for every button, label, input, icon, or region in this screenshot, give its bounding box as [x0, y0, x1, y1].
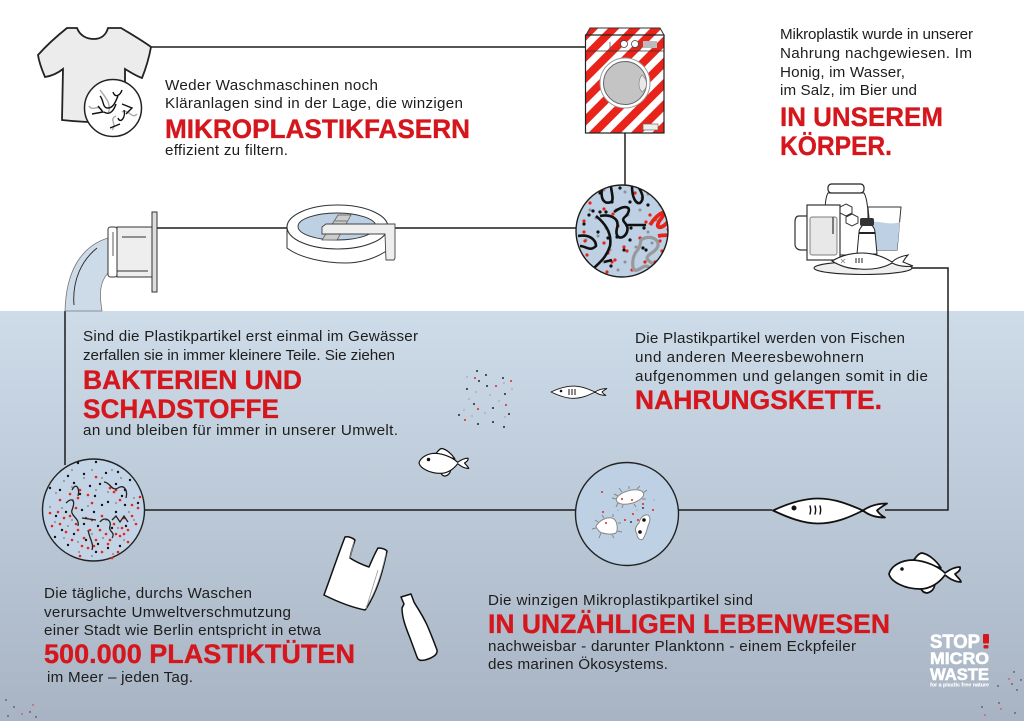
text block: in our food: im Salz, im Bier und [780, 82, 917, 99]
text block: food chain [635, 330, 928, 415]
text block: washing machines: MIKROPLASTIKFASERN [165, 114, 470, 144]
text block: countless organisms: des marinen Ökosystems. [488, 655, 668, 673]
icon: fish middle [419, 449, 469, 476]
logo: stop micro waste: for a plastic free nature [930, 682, 989, 688]
text block: bacteria and pollutants: BAKTERIEN UND [83, 365, 302, 395]
icon: large microplastic circle [42, 459, 144, 561]
icon: small shark details [560, 389, 575, 395]
text block: in our food: Nahrung nachgewiesen. Im [780, 45, 972, 62]
icon: plankton cell 2 [592, 514, 622, 538]
text block: Berlin comparison: verursachte Umweltverschmutzung [44, 604, 291, 621]
text block: bacteria and pollutants [83, 328, 418, 439]
text block: bacteria and pollutants: zerfallen sie in immer kleinere Teile. Sie ziehen [83, 347, 395, 364]
logo: stop micro waste: STOP [930, 632, 980, 653]
text block: washing machines: effizient zu filtern. [165, 142, 288, 159]
icon: clarifier basin [287, 205, 395, 263]
text block: countless organisms: Die winzigen Mikroplastikpartikel sind [488, 592, 753, 609]
icon: food and drink group [795, 184, 913, 274]
text block: Berlin comparison: einer Stadt wie Berlin entspricht in etwa [44, 622, 322, 639]
text block: washing machines [165, 77, 470, 159]
text block: bacteria and pollutants: an und bleiben für immer in unserer Umwelt. [83, 422, 398, 439]
text block: Berlin comparison: 500.000 PLASTIKTÜTEN [44, 639, 355, 669]
icon: plankton cell 1 [612, 486, 647, 508]
logo: stop micro waste [930, 632, 989, 688]
icon: t-shirt with fibres [38, 28, 151, 136]
icon: microplastic circle [576, 184, 670, 277]
text block: food chain: NAHRUNGSKETTE. [635, 385, 882, 415]
icon: large shark details [792, 506, 821, 514]
text block: washing machines: Weder Waschmaschinen noch [165, 77, 378, 94]
icon: plastic bottle [401, 594, 437, 660]
icon: fish eyes [428, 460, 902, 569]
icon: plate [814, 262, 912, 274]
icon: plastic bag [324, 537, 387, 610]
icon: salt shaker [857, 218, 877, 254]
icon: plankton circle [576, 462, 678, 566]
text block: Berlin comparison: Die tägliche, durchs Waschen [44, 585, 252, 602]
text block: Berlin comparison: im Meer – jeden Tag. [47, 669, 193, 686]
icon: water glass [868, 207, 901, 250]
text block: washing machines: Kläranlagen sind in der Lage, die winzigen [165, 95, 463, 112]
icon: large fish [889, 553, 961, 593]
text block: in our food: KÖRPER. [780, 131, 892, 161]
text block: bacteria and pollutants: Sind die Plastikpartikel erst einmal im Gewässer [83, 328, 418, 345]
icon: outflow pipe [65, 212, 157, 311]
icon: washing machine [586, 28, 664, 133]
text block: countless organisms: IN UNZÄHLIGEN LEBENWESEN [488, 609, 890, 639]
text block: in our food: Mikroplastik wurde in unserer [780, 26, 973, 43]
text block: countless organisms [488, 592, 890, 673]
text block: in our food [780, 26, 973, 161]
icon: plankton cell 3 [636, 515, 650, 540]
icon: beer mug [795, 205, 840, 260]
text block: Berlin comparison [44, 585, 355, 686]
text block: food chain: und anderen Meeresbewohnern [635, 349, 864, 366]
water background [0, 311, 1024, 721]
text block: countless organisms: nachweisbar - darunter Planktonn - einem Eckpfeiler [488, 638, 856, 655]
logo: stop micro waste: WASTE [930, 665, 989, 684]
corner specks [6, 672, 1021, 717]
icon: large shark [773, 498, 887, 524]
text block: food chain: Die Plastikpartikel werden von Fischen [635, 330, 905, 347]
text block: in our food: IN UNSEREM [780, 102, 943, 132]
icon: fibre magnifier [84, 80, 142, 136]
text block: in our food: Honig, im Wasser, [780, 64, 905, 81]
text block: food chain: aufgenommen und gelangen somit in die [635, 368, 928, 385]
logo: stop micro waste: MICRO [930, 649, 989, 668]
icon: small shark [551, 386, 607, 398]
particle cloud [459, 371, 512, 427]
icon: honey jar [825, 184, 868, 255]
connector lines [65, 47, 948, 510]
text block: bacteria and pollutants: SCHADSTOFFE [83, 394, 279, 424]
icon: fish on plate [832, 253, 913, 269]
